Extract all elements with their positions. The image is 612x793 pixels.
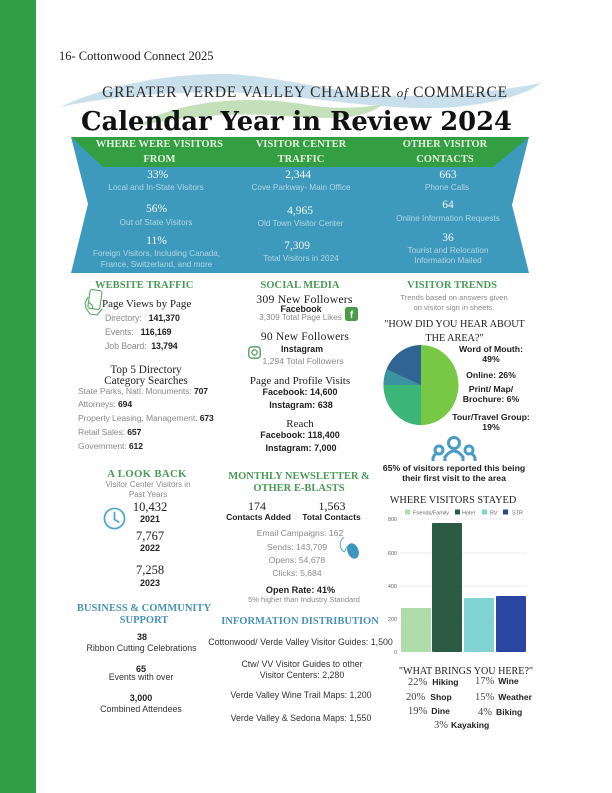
heading [228,471,370,494]
online: Online: 26% [466,370,516,380]
contacts added value: 174 [248,499,266,513]
2021 label: 2021 [140,514,160,524]
page views subheading: Page Views by Page [102,298,191,310]
panel: visitor trends [383,280,530,483]
state parks: State Parks, Natl. Monuments: 707 [78,386,208,396]
clicks: Clicks: 5,684 [272,568,322,578]
bar chart with legend: 0 [394,650,397,656]
icon: facebook [345,307,358,321]
heading: INFORMATION DISTRIBUTION [221,616,379,627]
guides to other centers: Ctw/ VV Visitor Guides to other [241,659,363,669]
first visit callout [383,463,525,483]
facebook visits: Facebook: 14,600 [262,387,338,397]
print map brochure: Brochure: 6% [463,394,519,404]
local visitors label: Local and In-State Visitors [108,183,204,192]
column heading [256,139,346,165]
heading: BUSINESS & COMMUNITY [77,603,211,614]
subtitle [105,480,191,498]
bar chart with legend: 800 [388,517,397,523]
panel: where visitors stayed [380,494,540,660]
out of state label: Out of State Visitors [120,218,192,227]
note: on visitor sign in sheets. [413,302,495,312]
cove parkway label: Cove Parkway- Main Office [251,183,351,192]
bar chart with legend: RV [490,510,498,516]
old town label: Old Town Visitor Center [258,219,343,228]
events label: Events with over [109,672,173,682]
foreign visitors label: Foreign Visitors, Including Canada, [93,249,220,258]
bar chart with legend [380,508,540,660]
shop: 20% Shop [406,692,452,703]
guides to other centers [241,659,363,681]
facebook followers: 309 New Followers [256,292,353,306]
heading: WEBSITE TRAFFIC [95,280,193,291]
email campaigns: Email Campaigns: 162 [257,528,343,538]
icon: facebook: f [350,310,354,321]
heading: A LOOK BACK [107,468,187,480]
2023 value: 7,258 [136,563,164,577]
column heading: TRAFFIC [278,154,324,165]
heading: SOCIAL MEDIA [260,280,340,291]
stat 36: 36 [442,232,454,244]
icon: group of people [432,436,476,461]
subtitle: Visitor Center Visitors in [105,480,191,489]
panel: website traffic [78,280,214,451]
attendees value: 3,000 [130,693,152,703]
property leasing: Property Leasing, Management: 673 [78,413,214,423]
panel: a look back [104,468,191,588]
attorneys: Attorneys: 694 [78,399,132,409]
stat 4,965: 4,965 [287,205,313,217]
stat 56%: 56% [146,203,167,215]
ribbon cuttings value: 38 [137,632,147,642]
2022 label: 2022 [140,543,160,553]
banner column: where were visitors from [93,139,223,268]
stat 663: 663 [439,169,457,181]
banner [71,137,529,273]
column heading: FROM [143,154,175,165]
online requests label: Online Information Requests [396,214,500,223]
icon: mouse [338,537,360,561]
government: Government: 612 [78,441,143,451]
icon: instagram [248,346,261,359]
biking: 4% Biking [478,707,522,718]
column heading: CONTACTS [416,154,474,165]
wine: 17% Wine [475,676,519,687]
job board views: Job Board: 13,794 [105,341,178,351]
column heading [403,139,488,165]
question heading: THE AREA?" [425,333,484,344]
bar chart with legend: Hotel [462,510,475,516]
banner column: other visitor contacts [396,139,500,265]
foreign visitors label [93,249,220,268]
top 5 subheading: Category Searches [104,374,188,386]
heading: MONTHLY NEWSLETTER & [228,471,370,482]
heading: SUPPORT [120,614,168,626]
question heading [384,319,525,344]
ribbon cuttings label: Ribbon Cutting Celebrations [86,643,197,653]
tour travel group: 19% [482,422,500,432]
pie legend [452,344,530,432]
sedona maps: Verde Valley & Sedona Maps: 1,550 [231,713,371,723]
dine: 19% Dine [408,706,450,717]
stat 33%: 33% [147,169,168,181]
top 5 subheading: Top 5 Directory [110,364,182,376]
2022 value: 7,767 [136,529,164,543]
sends: Sends: 143,709 [267,542,327,552]
tour travel group [452,412,530,432]
attendees label: Combined Attendees [100,704,182,714]
first visit callout: 65% of visitors reported this being [383,463,525,473]
panel: information distribution [205,615,395,725]
facebook page likes: 3,309 Total Page Likes [259,313,342,322]
bar chart with legend: STR [512,510,523,516]
instagram total followers: 1,294 Total Followers [262,356,344,366]
contacts added label: Contacts Added [226,512,291,522]
logo swoosh background [60,74,541,126]
panel: what brings you here [390,665,550,735]
word of mouth: 49% [482,354,500,364]
column heading: VISITOR CENTER [256,139,346,150]
bar chart with legend: 200 [388,617,397,623]
tourist mail label [407,246,489,265]
visitor guides: Cottonwood/ Verde Valley Visitor Guides: 1,500 [208,637,393,647]
word of mouth [459,344,523,364]
stat 64: 64 [442,199,454,211]
weather: 15% Weather [475,692,532,703]
green side strip [0,0,36,793]
panel: social media [248,280,358,453]
column heading [96,139,223,165]
facebook label: Facebook [280,304,322,314]
open rate: Open Rate: 41% [266,585,335,595]
phone calls label: Phone Calls [425,183,469,192]
subtitle: Past Years [129,490,167,498]
heading: OTHER E-BLASTS [253,482,345,494]
opens: Opens: 54,678 [269,555,325,565]
note [400,293,508,312]
instagram label: Instagram [281,344,323,354]
panel: business and community support [76,603,216,718]
column heading: WHERE WERE VISITORS [96,139,223,150]
instagram followers: 90 New Followers [261,331,349,343]
foreign visitors label: France, Switzerland, and more [101,260,212,268]
organisation name: GREATER VERDE VALLEY CHAMBER of COMMERCE [102,84,508,101]
print map brochure: Print/ Map/ [469,384,513,394]
facebook reach: Facebook: 118,400 [260,430,340,440]
title: Calendar Year in Review 2024 [81,107,512,137]
bar chart with legend: Friends/Family [413,510,449,516]
column heading: OTHER VISITOR [403,139,487,150]
stat 2,344: 2,344 [285,169,311,181]
wine trail maps: Verde Valley Wine Trail Maps: 1,200 [230,690,372,700]
heading [77,603,211,626]
tour travel group: Tour/Travel Group: [452,412,530,422]
word of mouth: Word of Mouth: [459,344,523,354]
pie chart [384,345,458,425]
banner column: visitor center traffic [251,139,351,263]
kayaking: 3% Kayaking [434,720,489,731]
hiking: 22% Hiking [408,677,459,688]
top 5 subheading [104,364,188,386]
reach: Reach [286,418,314,430]
retail sales: Retail Sales: 657 [78,427,141,437]
directory views: Directory: 141,370 [105,313,180,323]
guides to other centers: Visitor Centers: 2,280 [260,670,344,680]
events views: Events: 116,169 [105,327,171,337]
instagram visits: Instagram: 638 [269,400,333,410]
page and profile visits: Page and Profile Visits [250,375,350,387]
bar chart with legend: 600 [388,551,397,557]
2023 label: 2023 [140,578,160,588]
open rate note: 5% higher than Industry Standard [248,595,360,604]
stat 11%: 11% [146,235,167,247]
heading: WHERE VISITORS STAYED [390,495,516,506]
panel: monthly newsletter [226,471,370,604]
bar chart with legend: 400 [388,584,397,590]
total visitors label: Total Visitors in 2024 [263,254,339,263]
print map brochure [463,384,519,404]
icon: phone in hand [84,289,102,316]
heading: VISITOR TRENDS [407,280,497,291]
tourist mail label: Tourist and Relocation [407,246,489,255]
tourist mail label: Information Mailed [414,256,482,265]
events value: 65 [136,664,146,674]
2021 value: 10,432 [133,500,167,514]
note: Trends based on answers given [400,293,508,302]
first visit callout: their first visit to the area [402,473,506,483]
question heading: "HOW DID YOU HEAR ABOUT [384,319,525,330]
icon: clock [104,508,126,530]
heading: "WHAT BRINGS YOU HERE?" [399,666,533,677]
total contacts label: Total Contacts [302,512,361,522]
total contacts value: 1,563 [318,499,346,513]
stat 7,309: 7,309 [284,240,310,252]
instagram reach: Instagram: 7,000 [265,443,337,453]
page header: 16- Cottonwood Connect 2025 [59,49,214,63]
